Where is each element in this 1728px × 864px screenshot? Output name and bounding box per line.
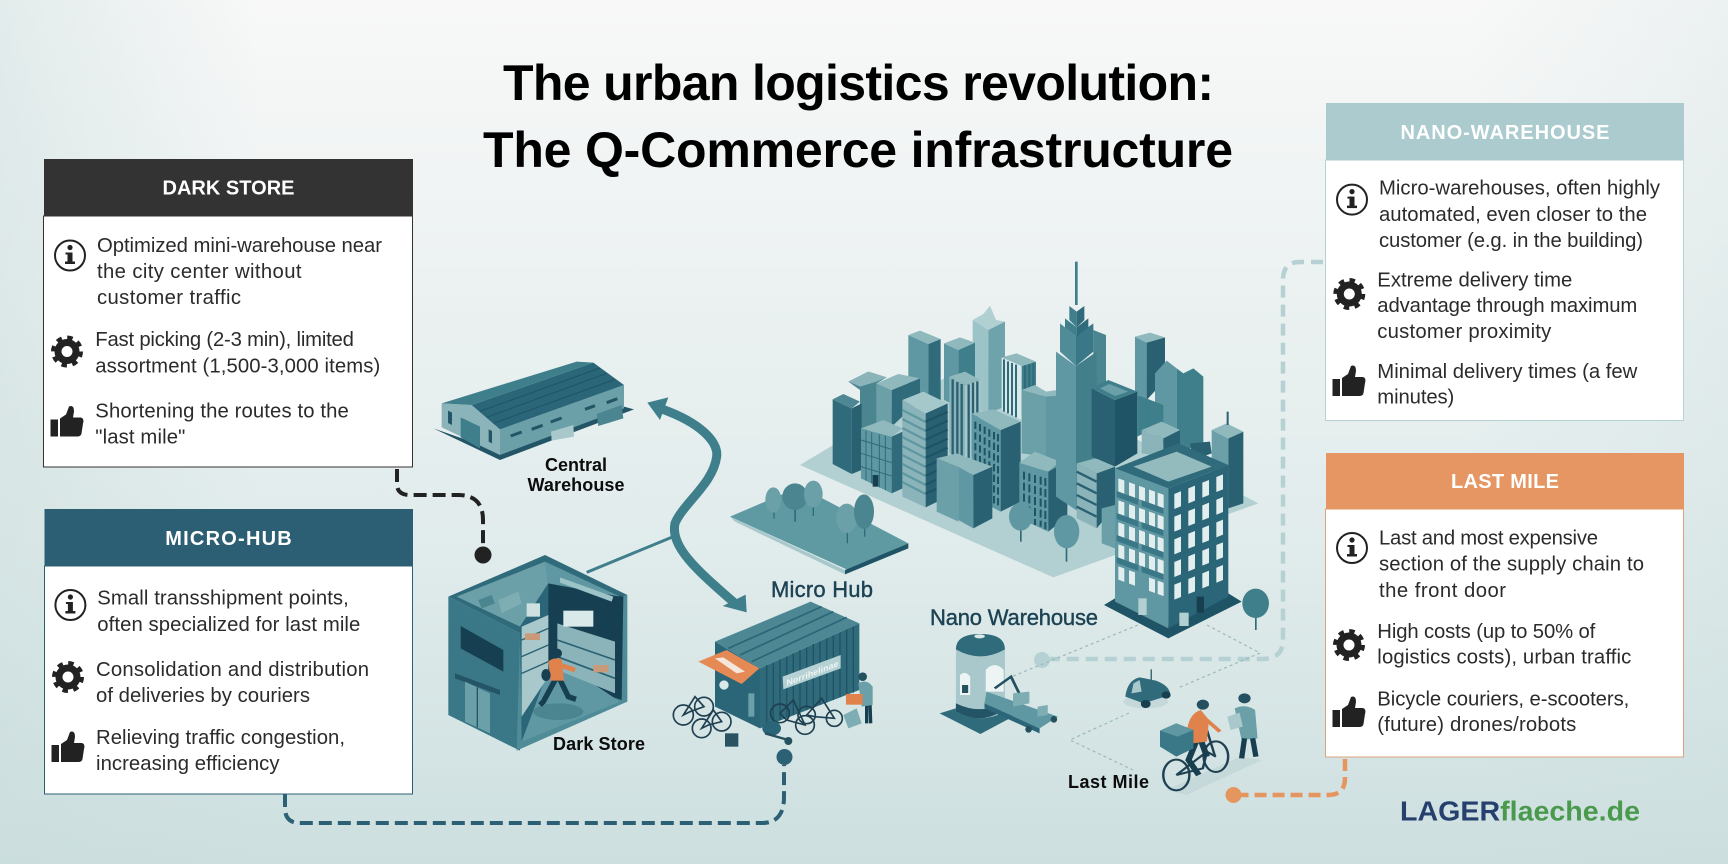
icon: gear xyxy=(1336,280,1363,308)
illustration: bicycle courier and customer xyxy=(1160,693,1262,795)
cargo scooter xyxy=(725,721,792,747)
icon: thumbs up xyxy=(1332,366,1365,396)
container sign: Norrihelinae xyxy=(787,658,838,688)
icon: info xyxy=(1337,533,1367,563)
text: definition: Optimized mini-warehouse near xyxy=(97,235,382,257)
header: dark store xyxy=(44,159,413,216)
text: characteristics: Extreme delivery time xyxy=(1377,269,1572,291)
text: definition: often specialized for last mile xyxy=(97,614,360,636)
text: characteristics xyxy=(96,659,369,707)
icon: info xyxy=(1337,185,1367,215)
text: benefits xyxy=(95,400,349,449)
text: characteristics: Consolidation and distribution xyxy=(96,659,369,681)
icon: thumbs up xyxy=(50,406,83,436)
nano warehouse apartment building xyxy=(1104,443,1269,638)
courier with parcel xyxy=(843,672,873,728)
icon: gear xyxy=(1336,632,1362,658)
text: benefits: increasing efficiency xyxy=(96,753,280,775)
bicycles xyxy=(673,697,842,738)
text: definition: Small transshipment points, xyxy=(97,588,349,610)
label: micro hub: Micro Hub xyxy=(771,577,873,602)
header: last mile: LAST MILE xyxy=(1451,471,1559,493)
text: benefits: Shortening the routes to the xyxy=(95,400,349,422)
text: benefits: "last mile" xyxy=(95,427,185,449)
connector: last mile xyxy=(1226,759,1345,803)
text: definition: customer traffic xyxy=(97,287,241,309)
text: benefits: Minimal delivery times (a few xyxy=(1377,361,1638,383)
text: definition: customer (e.g. in the building) xyxy=(1379,230,1643,252)
text: characteristics xyxy=(1377,269,1637,343)
label: central warehouse xyxy=(528,455,624,495)
orange awning xyxy=(698,650,759,684)
header: nano-warehouse: NANO-WAREHOUSE xyxy=(1400,122,1610,144)
customer xyxy=(1227,693,1258,758)
text: definition xyxy=(1379,528,1644,602)
icon: info xyxy=(55,240,85,270)
park trees xyxy=(765,481,874,543)
dotted delivery routes xyxy=(1011,625,1260,770)
text: characteristics xyxy=(95,329,380,378)
logo: LAGERflaeche.de xyxy=(1400,796,1640,826)
icon: info xyxy=(55,590,85,620)
connector: micro-hub xyxy=(285,749,792,823)
text: characteristics xyxy=(1377,621,1631,668)
text: definition: Micro-warehouses, often highly xyxy=(1379,178,1661,200)
illustration: city xyxy=(800,262,1269,638)
label: dark store: Dark Store xyxy=(553,734,645,754)
text: characteristics: assortment (1,500-3,000 items) xyxy=(95,356,380,378)
label: nano warehouse: Nano Warehouse xyxy=(930,605,1098,630)
illustration: central warehouse xyxy=(433,362,634,460)
label: central warehouse: Warehouse xyxy=(528,475,624,495)
icon: thumbs up xyxy=(52,732,84,762)
header: micro-hub: MICRO-HUB xyxy=(165,528,292,550)
text: benefits: Bicycle couriers, e-scooters, xyxy=(1377,688,1629,710)
picker figure xyxy=(533,649,583,720)
text: characteristics: Fast picking (2-3 min), limited xyxy=(95,329,354,351)
panel: nano-warehouse xyxy=(1326,103,1684,420)
courier xyxy=(1160,700,1220,775)
title xyxy=(483,55,1233,178)
city ground plate xyxy=(800,357,1258,577)
text: definition xyxy=(97,235,382,309)
text: benefits xyxy=(1377,688,1629,736)
text: benefits xyxy=(1377,361,1638,408)
illustration: dark store xyxy=(448,555,627,751)
title: The Q-Commerce infrastructure xyxy=(483,122,1233,178)
header: nano-warehouse xyxy=(1326,103,1684,160)
panel: last mile xyxy=(1326,453,1684,757)
label: last mile: Last Mile xyxy=(1068,772,1149,792)
city trees xyxy=(1009,503,1079,562)
text: benefits xyxy=(96,727,345,775)
text: definition xyxy=(97,588,360,636)
text: benefits: Relieving traffic congestion, xyxy=(96,727,345,749)
text: definition: the front door xyxy=(1379,580,1506,602)
text: definition: Last and most expensive xyxy=(1379,528,1598,550)
shelves xyxy=(522,603,615,717)
connector: nano-warehouse xyxy=(1034,262,1323,668)
panel: dark store xyxy=(44,159,413,467)
text: definition: automated, even closer to the xyxy=(1379,204,1647,226)
text: benefits: (future) drones/robots xyxy=(1377,714,1576,736)
text: characteristics: advantage through maximum xyxy=(1377,295,1637,317)
title: The urban logistics revolution: xyxy=(503,55,1214,111)
text: characteristics: High costs (up to 50% of xyxy=(1377,621,1596,643)
header: micro-hub xyxy=(44,509,413,566)
icon: thumbs up xyxy=(1332,697,1365,727)
illustration: micro hub container xyxy=(673,602,873,747)
text: definition xyxy=(1379,178,1661,252)
text: definition: the city center without xyxy=(97,261,302,283)
panel: micro-hub xyxy=(44,509,413,794)
icon: gear xyxy=(54,338,80,365)
text: characteristics: logistics costs), urban traffic xyxy=(1377,646,1631,668)
text: characteristics: customer proximity xyxy=(1377,321,1552,343)
text: characteristics: of deliveries by couriers xyxy=(96,685,310,707)
header: last mile xyxy=(1326,453,1684,510)
illustration: delivery robot xyxy=(1123,669,1171,708)
header: dark store: DARK STORE xyxy=(162,178,294,200)
arrows: flows from central warehouse xyxy=(587,397,747,612)
illustration: automated nano warehouse unit xyxy=(940,634,1058,734)
connector: dark store xyxy=(397,469,492,564)
skyline buildings xyxy=(833,262,1243,548)
text: benefits: minutes) xyxy=(1377,386,1454,408)
text: definition: section of the supply chain to xyxy=(1379,554,1644,576)
label: central warehouse: Central xyxy=(545,455,607,475)
icon: gear xyxy=(54,664,82,690)
illustration: park xyxy=(730,481,908,574)
